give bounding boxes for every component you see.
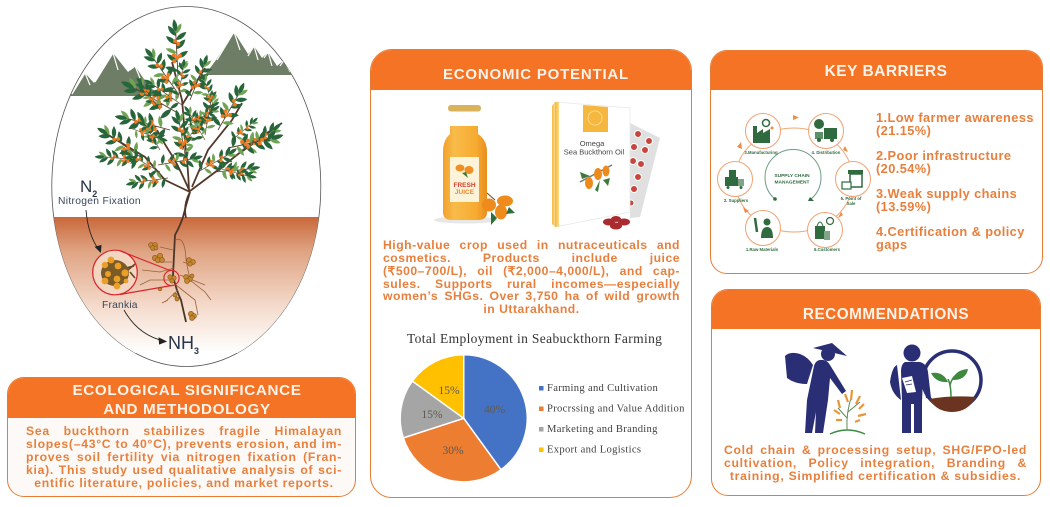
text line 2: cosmetics. Products include juice	[383, 251, 680, 265]
panel: key barriers	[710, 50, 1043, 274]
arrow: Frankia to NH3	[124, 310, 166, 344]
heading: AND METHODOLOGY	[103, 401, 271, 418]
tree	[90, 18, 288, 218]
trunk and roots	[140, 192, 211, 322]
node labels: Sale	[847, 201, 856, 206]
text line 4: sules. Supports rural incomes—especially	[383, 277, 680, 291]
mountains	[70, 32, 296, 96]
juice bottle	[434, 105, 515, 225]
centre label: SUPPLY CHAIN	[774, 173, 810, 179]
oil box: Sea Buckthorn Oil	[564, 148, 625, 156]
barrier 4: gaps	[876, 237, 908, 252]
chart title: Total Employment in Seabuckthorn Farming	[407, 331, 662, 346]
panel: ecological significance and methodology	[7, 377, 356, 497]
barrier 4: 4.Certification & policy	[876, 224, 1025, 239]
legend: Farming and Cultivation	[547, 383, 658, 394]
barrier 2: (20.54%)	[876, 161, 931, 176]
arrowheads	[737, 115, 848, 218]
label: N2: N	[80, 177, 92, 196]
node labels: 6.Customers	[814, 247, 841, 252]
pie labels: 30%	[442, 445, 464, 457]
node labels	[724, 150, 862, 252]
legend	[539, 383, 685, 456]
legend: Marketing and Branding	[547, 424, 658, 435]
barrier 3: 3.Weak supply chains	[876, 186, 1017, 201]
icon: farmer with basket	[785, 343, 847, 433]
pie slices	[400, 355, 527, 482]
text line 2: cultivation, Policy integration, Branding &	[724, 456, 1027, 470]
text line 4: kia). This study used qualitative analysis of sci-	[26, 463, 342, 477]
barrier 2	[876, 148, 1011, 176]
centre label: MANAGEMENT	[775, 180, 810, 186]
text line 2: slopes(–43°C to 40°C), prevents erosion, and im-	[26, 437, 342, 451]
label: NH3: NH	[168, 333, 194, 353]
text line 5: women’s SHGs. Over 3,750 ha of wild growth	[383, 289, 680, 303]
panel header	[7, 377, 356, 418]
callout: Frankia magnified	[93, 250, 179, 295]
label: Frankia: Frankia	[102, 300, 138, 311]
illustration: sea buckthorn nitrogen fixation oval	[51, 6, 322, 367]
text line 3: training, Simplified certification & subsidies.	[730, 469, 1021, 483]
icon: orange plant	[830, 390, 866, 434]
text line 1: Cold chain & processing setup, SHG/FPO-led	[724, 443, 1027, 457]
text line 3: proves soil fertility via nitrogen fixation (Fran-	[26, 450, 342, 464]
root nodules	[149, 243, 196, 320]
heading: ECONOMIC POTENTIAL	[443, 66, 629, 83]
barrier 3: (13.59%)	[876, 199, 931, 214]
red capsules	[603, 216, 630, 230]
icon: researcher with seedling	[890, 344, 981, 433]
heading: KEY BARRIERS	[825, 63, 947, 80]
heading	[72, 382, 302, 418]
icon: customers	[815, 218, 834, 240]
text line 6: in Uttarakhand.	[483, 302, 580, 316]
pie labels	[421, 385, 505, 457]
oval outline	[52, 6, 321, 366]
text line 3: (₹500–700/L), oil (₹2,000–4,000/L), and cap-	[383, 264, 680, 278]
node labels: 3.Manufacturing	[744, 150, 778, 155]
label: Nitrogen Fixation: Nitrogen Fixation	[58, 196, 141, 207]
barrier 1	[876, 110, 1034, 138]
panel: economic potential	[370, 49, 692, 498]
heading: ECOLOGICAL SIGNIFICANCE	[72, 382, 302, 399]
node labels: 1.Raw Materials	[746, 247, 779, 252]
text line 1: High-value crop used in nutraceuticals and	[383, 238, 680, 252]
panel header	[710, 50, 1043, 90]
cycle ring	[735, 128, 853, 232]
node labels: 2. Suppliers	[724, 198, 749, 203]
barrier 2: 2.Poor infrastructure	[876, 148, 1011, 163]
legend: Procrssing and Value Addition	[547, 404, 685, 414]
oil box	[552, 102, 630, 227]
legend: Export and Logistics	[547, 444, 641, 456]
label: N2: 2	[92, 189, 97, 199]
heading: RECOMMENDATIONS	[803, 306, 969, 323]
node labels: 5. Point of	[841, 196, 862, 201]
barrier 1: 1.Low farmer awareness	[876, 110, 1034, 125]
oil box: Omega	[580, 139, 605, 148]
barrier 1: (21.15%)	[876, 123, 931, 138]
icon: manufacturing	[753, 120, 774, 143]
icon: point of sale	[842, 170, 863, 189]
panel: recommendations	[711, 289, 1041, 496]
panel header	[711, 289, 1041, 329]
barrier 3	[876, 186, 1017, 214]
centre arc	[765, 150, 821, 201]
pie labels: 15%	[438, 385, 460, 397]
node labels: 4. Distribution	[812, 150, 841, 155]
blister pack	[628, 123, 660, 218]
arrow: N2 into nodule	[86, 210, 101, 252]
juice bottle: JUICE	[455, 189, 475, 196]
label: NH3: 3	[194, 346, 199, 356]
barrier 4	[876, 224, 1025, 252]
pie labels: 15%	[421, 409, 443, 421]
panel header	[370, 49, 692, 90]
text line 5: entific literature, policies, and market reports.	[34, 476, 334, 490]
cycle nodes	[718, 114, 870, 248]
text line 1: Sea buckthorn stabilizes fragile Himalayan	[26, 424, 342, 438]
soil	[54, 217, 319, 353]
juice bottle: FRESH	[453, 182, 476, 189]
pie labels: 40%	[484, 404, 505, 416]
icon: distribution	[814, 119, 837, 142]
centre label	[774, 173, 810, 186]
icon: raw materials	[755, 218, 773, 238]
icon: suppliers	[725, 170, 744, 189]
